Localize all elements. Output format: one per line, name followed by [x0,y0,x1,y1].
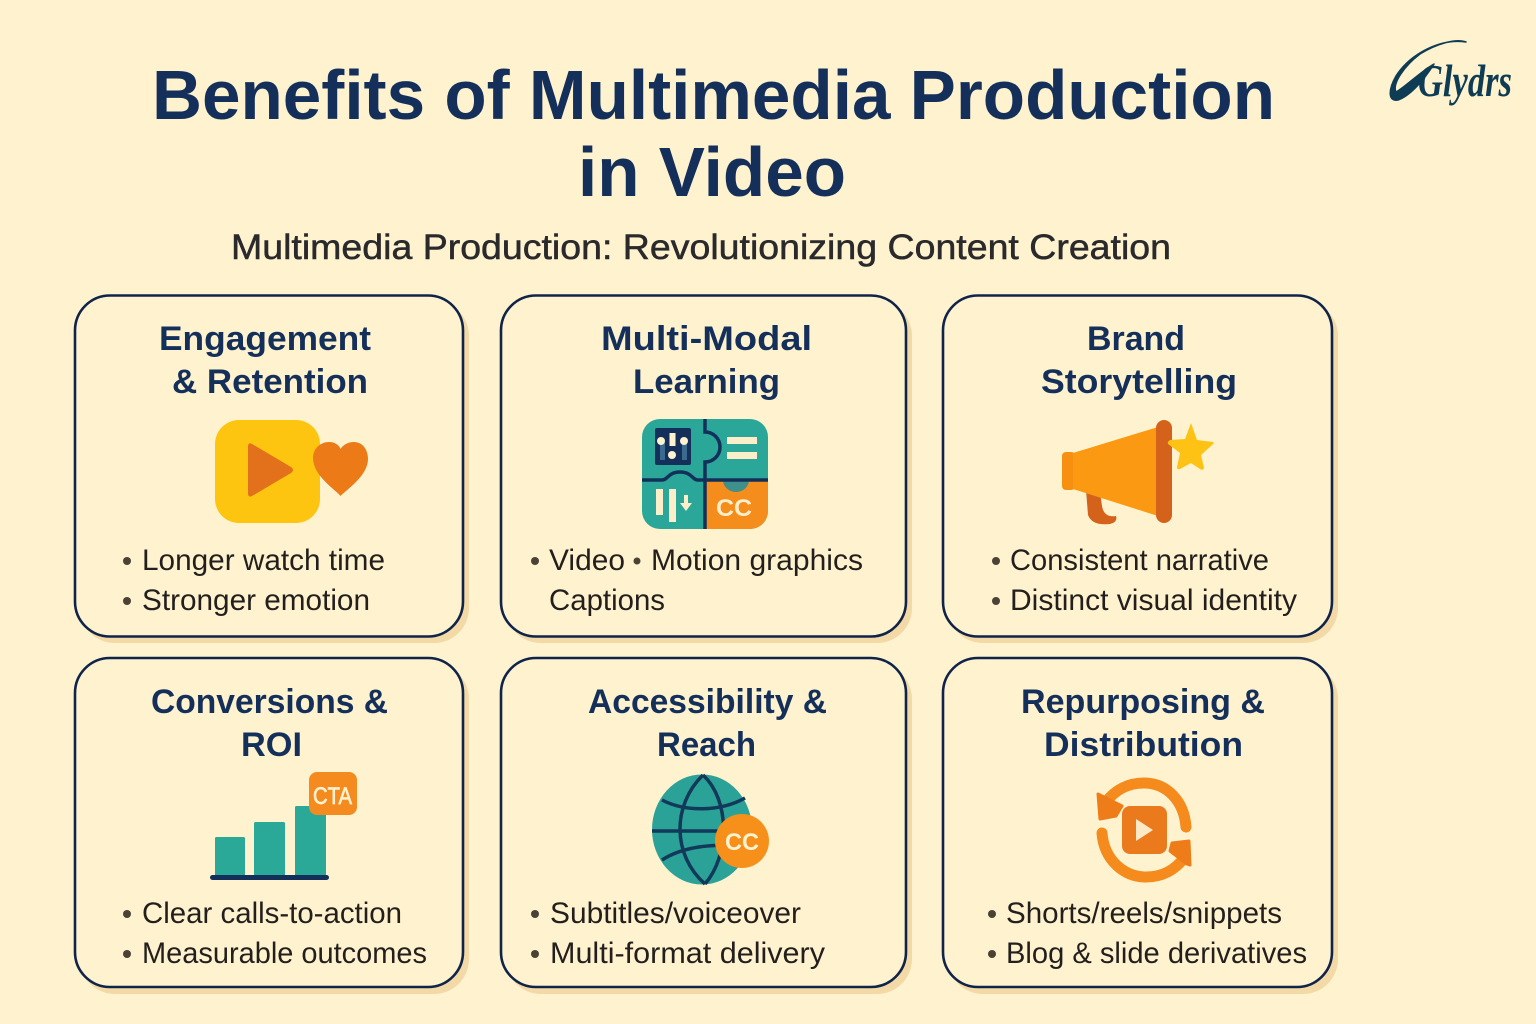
heading: multi-modal learning: Multi-Modal [601,320,812,358]
heading: conversions and ROI: Conversions & [151,683,388,721]
panel: brand storytelling [943,296,1338,643]
bullets: Distinct visual identity [1010,584,1297,617]
bullets: Stronger emotion [142,584,370,617]
heading: engagement and retention: & Retention [172,363,368,401]
heading: brand storytelling: Storytelling [1041,363,1237,401]
icon: play button and heart [215,420,368,523]
icon: globe with captions [652,774,769,884]
panel: engagement and retention [75,296,469,643]
bullets [123,544,385,617]
bullets: Longer watch time [142,544,385,577]
heading: repurposing and distribution [1021,683,1265,764]
bullets: Subtitles/voiceover [550,897,801,930]
title: Benefits of Multimedia Production [152,56,1275,134]
bullets: Shorts/reels/snippets [1006,897,1282,930]
heading: brand storytelling [1041,320,1237,401]
heading: engagement and retention [159,320,371,401]
bullets [531,897,825,970]
icon: megaphone and star [1062,420,1213,524]
heading: brand storytelling: Brand [1087,320,1185,358]
icon: bar chart with CTA [210,772,357,880]
heading: conversions and ROI: ROI [241,726,302,764]
subtitle: Multimedia Production: Revolutionizing Content Creation [231,228,1171,267]
heading: engagement and retention: Engagement [159,320,371,358]
icon: globe with captions: CC [725,829,759,856]
title: in Video [578,133,846,211]
icon: media puzzle: CC [716,495,752,522]
bullets: Measurable outcomes [142,937,427,970]
bullets: Video [549,544,625,577]
bullets: Consistent narrative [1010,544,1269,577]
logo: Glydrs [1390,41,1512,106]
bullets [988,897,1307,970]
bullets: Multi-format delivery [550,937,825,970]
panel: conversions and ROI [75,658,469,994]
heading: accessibility and reach: Accessibility & [588,683,827,721]
heading: accessibility and reach: Reach [657,726,756,764]
bullets: Clear calls-to-action [142,897,402,930]
bullets: Blog & slide derivatives [1006,937,1307,970]
bullets: Captions [549,584,665,617]
bullets [992,544,1297,617]
bullets [531,544,863,617]
panel: repurposing and distribution [943,658,1338,994]
heading: repurposing and distribution: Repurposing & [1021,683,1265,721]
panel: multi-modal learning [501,296,912,643]
panel: accessibility and reach [501,658,912,994]
heading: repurposing and distribution: Distribution [1044,726,1243,764]
title [152,56,1275,211]
heading: multi-modal learning [601,320,812,401]
heading: multi-modal learning: Learning [633,363,780,401]
icon: media puzzle [642,419,768,529]
heading: conversions and ROI [151,683,388,764]
heading: accessibility and reach [588,683,827,764]
icon: bar chart with CTA: CTA [313,783,352,810]
icon: repurpose cycle [1098,783,1190,877]
bullets [123,897,427,970]
bullets: Motion graphics [651,544,863,577]
